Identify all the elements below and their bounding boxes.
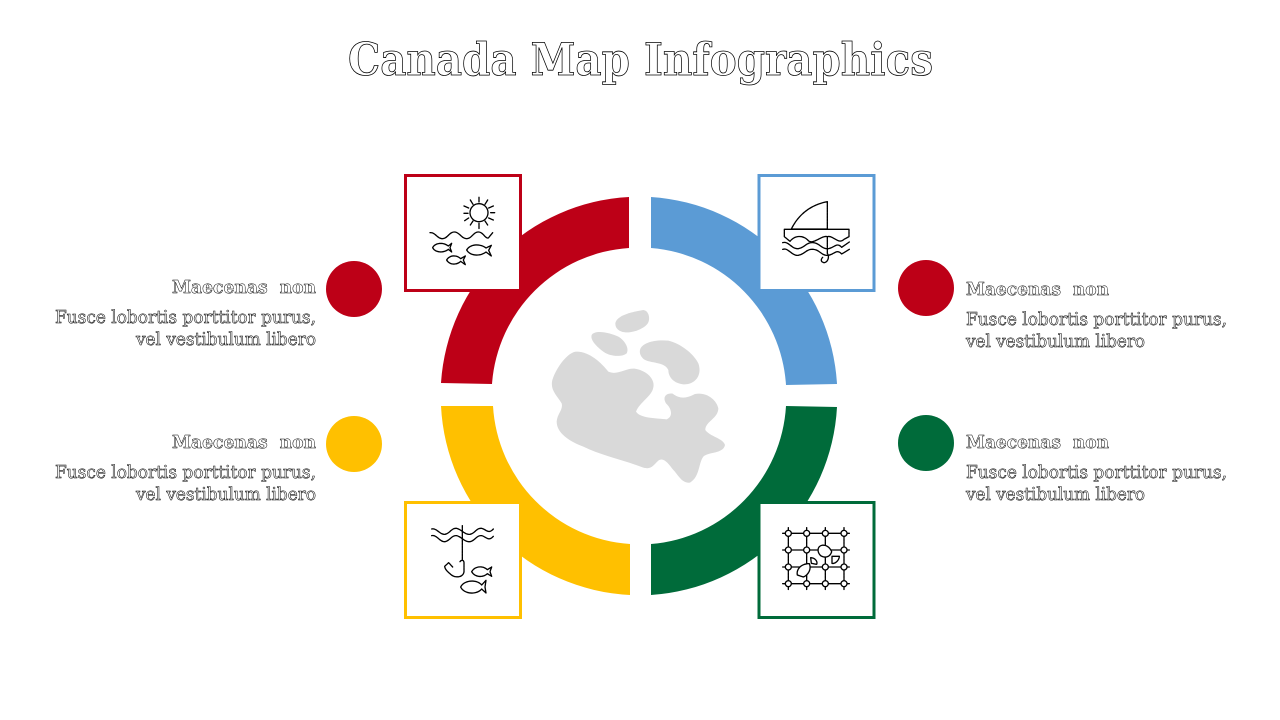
icon box: sailboat [759, 176, 874, 290]
marker: green right [898, 415, 954, 471]
heading: Maecenas non [966, 279, 1109, 300]
title: Canada Map Infographics [348, 33, 933, 86]
ring segment: red [441, 197, 629, 384]
icon: fishing net [783, 528, 849, 590]
text block: top right [965, 279, 1227, 352]
heading: Maecenas non [172, 432, 316, 453]
canada map [552, 310, 725, 483]
text block: top left [55, 277, 316, 350]
icon box: fish hook [406, 502, 520, 618]
heading: Maecenas non [966, 432, 1109, 453]
body line 1: Fusce lobortis porttitor purus, [966, 462, 1227, 483]
icon: fish hook [432, 526, 493, 593]
body line 2: vel vestibulum libero [965, 331, 1145, 352]
ring segment: green [651, 406, 837, 595]
icon box: sun and fish [406, 176, 520, 290]
heading: Maecenas non [172, 277, 316, 298]
body line 1: Fusce lobortis porttitor purus, [55, 462, 316, 483]
text block: bottom left [55, 432, 316, 505]
ring segment: blue [651, 197, 837, 385]
body line 2: vel vestibulum libero [135, 484, 316, 505]
marker: red left [326, 261, 382, 317]
body line 1: Fusce lobortis porttitor purus, [55, 307, 316, 328]
marker: yellow left [326, 416, 382, 472]
text block: bottom right [965, 432, 1227, 505]
ring segment: yellow [441, 406, 630, 595]
body line 1: Fusce lobortis porttitor purus, [966, 309, 1227, 330]
icon: sun and fish [430, 197, 495, 265]
donut ring [441, 197, 837, 595]
marker: red right [898, 260, 954, 316]
icon: sailboat on waves [783, 202, 849, 263]
body line 2: vel vestibulum libero [135, 329, 316, 350]
body line 2: vel vestibulum libero [965, 484, 1145, 505]
icon box: fishing net [759, 502, 874, 618]
